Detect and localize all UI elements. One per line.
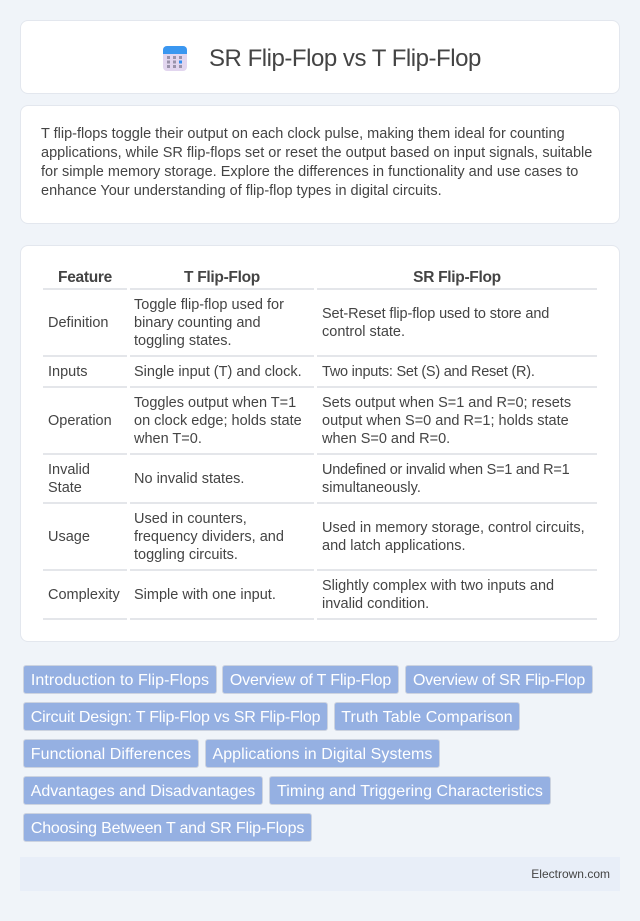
comparison table: toggling circuits. [134,547,238,563]
comparison table: Single input (T) and clock. [134,364,302,380]
topic tags: Overview of SR Flip-Flop [413,672,585,689]
comparison table: Simple with one input. [134,587,276,603]
comparison table: output when S=0 and R=1; holds state [322,413,569,429]
comparison table: simultaneously. [322,480,421,496]
comparison table: Definition [48,315,108,331]
comparison table: Usage [48,529,90,545]
icon: calculator-like calendar [163,46,187,71]
comparison table: invalid condition. [322,596,429,612]
intro text: for simple memory storage. Explore the differences in functionality and use cases to [41,164,578,180]
comparison table: Complexity [48,587,120,603]
comparison table: binary counting and [134,315,261,331]
intro panel [20,105,620,224]
topic tags: Circuit Design: T Flip-Flop vs SR Flip-Flop [31,709,320,726]
topic tags: Introduction to Flip-Flops [31,672,209,689]
comparison table: Used in counters, [134,511,247,527]
comparison table: Used in memory storage, control circuits, [322,520,585,536]
comparison table: Two inputs: Set (S) and Reset (R). [322,364,535,380]
intro text: enhance Your understanding of flip-flop types in digital circuits. [41,183,442,199]
comparison table: Toggles output when T=1 [134,395,296,411]
topic tags: Advantages and Disadvantages [31,783,255,800]
comparison table: No invalid states. [134,471,244,487]
comparison table: when S=0 and R=0. [322,431,450,447]
comparison table: Undefined or invalid when S=1 and R=1 [322,462,569,478]
intro text [41,126,592,199]
intro text: applications, while SR flip-flops set or reset the output based on input signals, suitable [41,145,592,161]
title: SR Flip-Flop vs T Flip-Flop [209,45,481,72]
topic tags: Truth Table Comparison [341,709,513,726]
comparison table: Slightly complex with two inputs and [322,578,554,594]
comparison table: Invalid [48,462,90,478]
comparison table: control state. [322,324,405,340]
comparison table: Operation [48,413,112,429]
topic tags: Functional Differences [31,746,191,763]
topic tags: Choosing Between T and SR Flip-Flops [31,820,304,837]
comparison table: on clock edge; holds state [134,413,302,429]
footer text: Electrown.com [531,867,610,881]
comparison table: Feature [58,269,112,286]
comparison table: State [48,480,82,496]
comparison table: Toggle flip-flop used for [134,297,284,313]
topic tags [23,665,593,842]
header card [20,20,620,94]
comparison table: Set-Reset flip-flop used to store and [322,306,549,322]
comparison table: Sets output when S=1 and R=0; resets [322,395,571,411]
topic tags: Applications in Digital Systems [212,746,433,763]
comparison table: T Flip-Flop [184,269,260,286]
table panel [20,245,620,642]
comparison table: Inputs [48,364,88,380]
comparison table: SR Flip-Flop [413,269,501,286]
comparison table: frequency dividers, and [134,529,284,545]
topic tags: Timing and Triggering Characteristics [277,783,543,800]
footer [20,857,620,891]
topic tags: Overview of T Flip-Flop [230,672,391,689]
comparison table: toggling states. [134,333,232,349]
intro text: T flip-flops toggle their output on each clock pulse, making them ideal for counting [41,126,565,142]
comparison table: and latch applications. [322,538,466,554]
comparison table: when T=0. [134,431,202,447]
